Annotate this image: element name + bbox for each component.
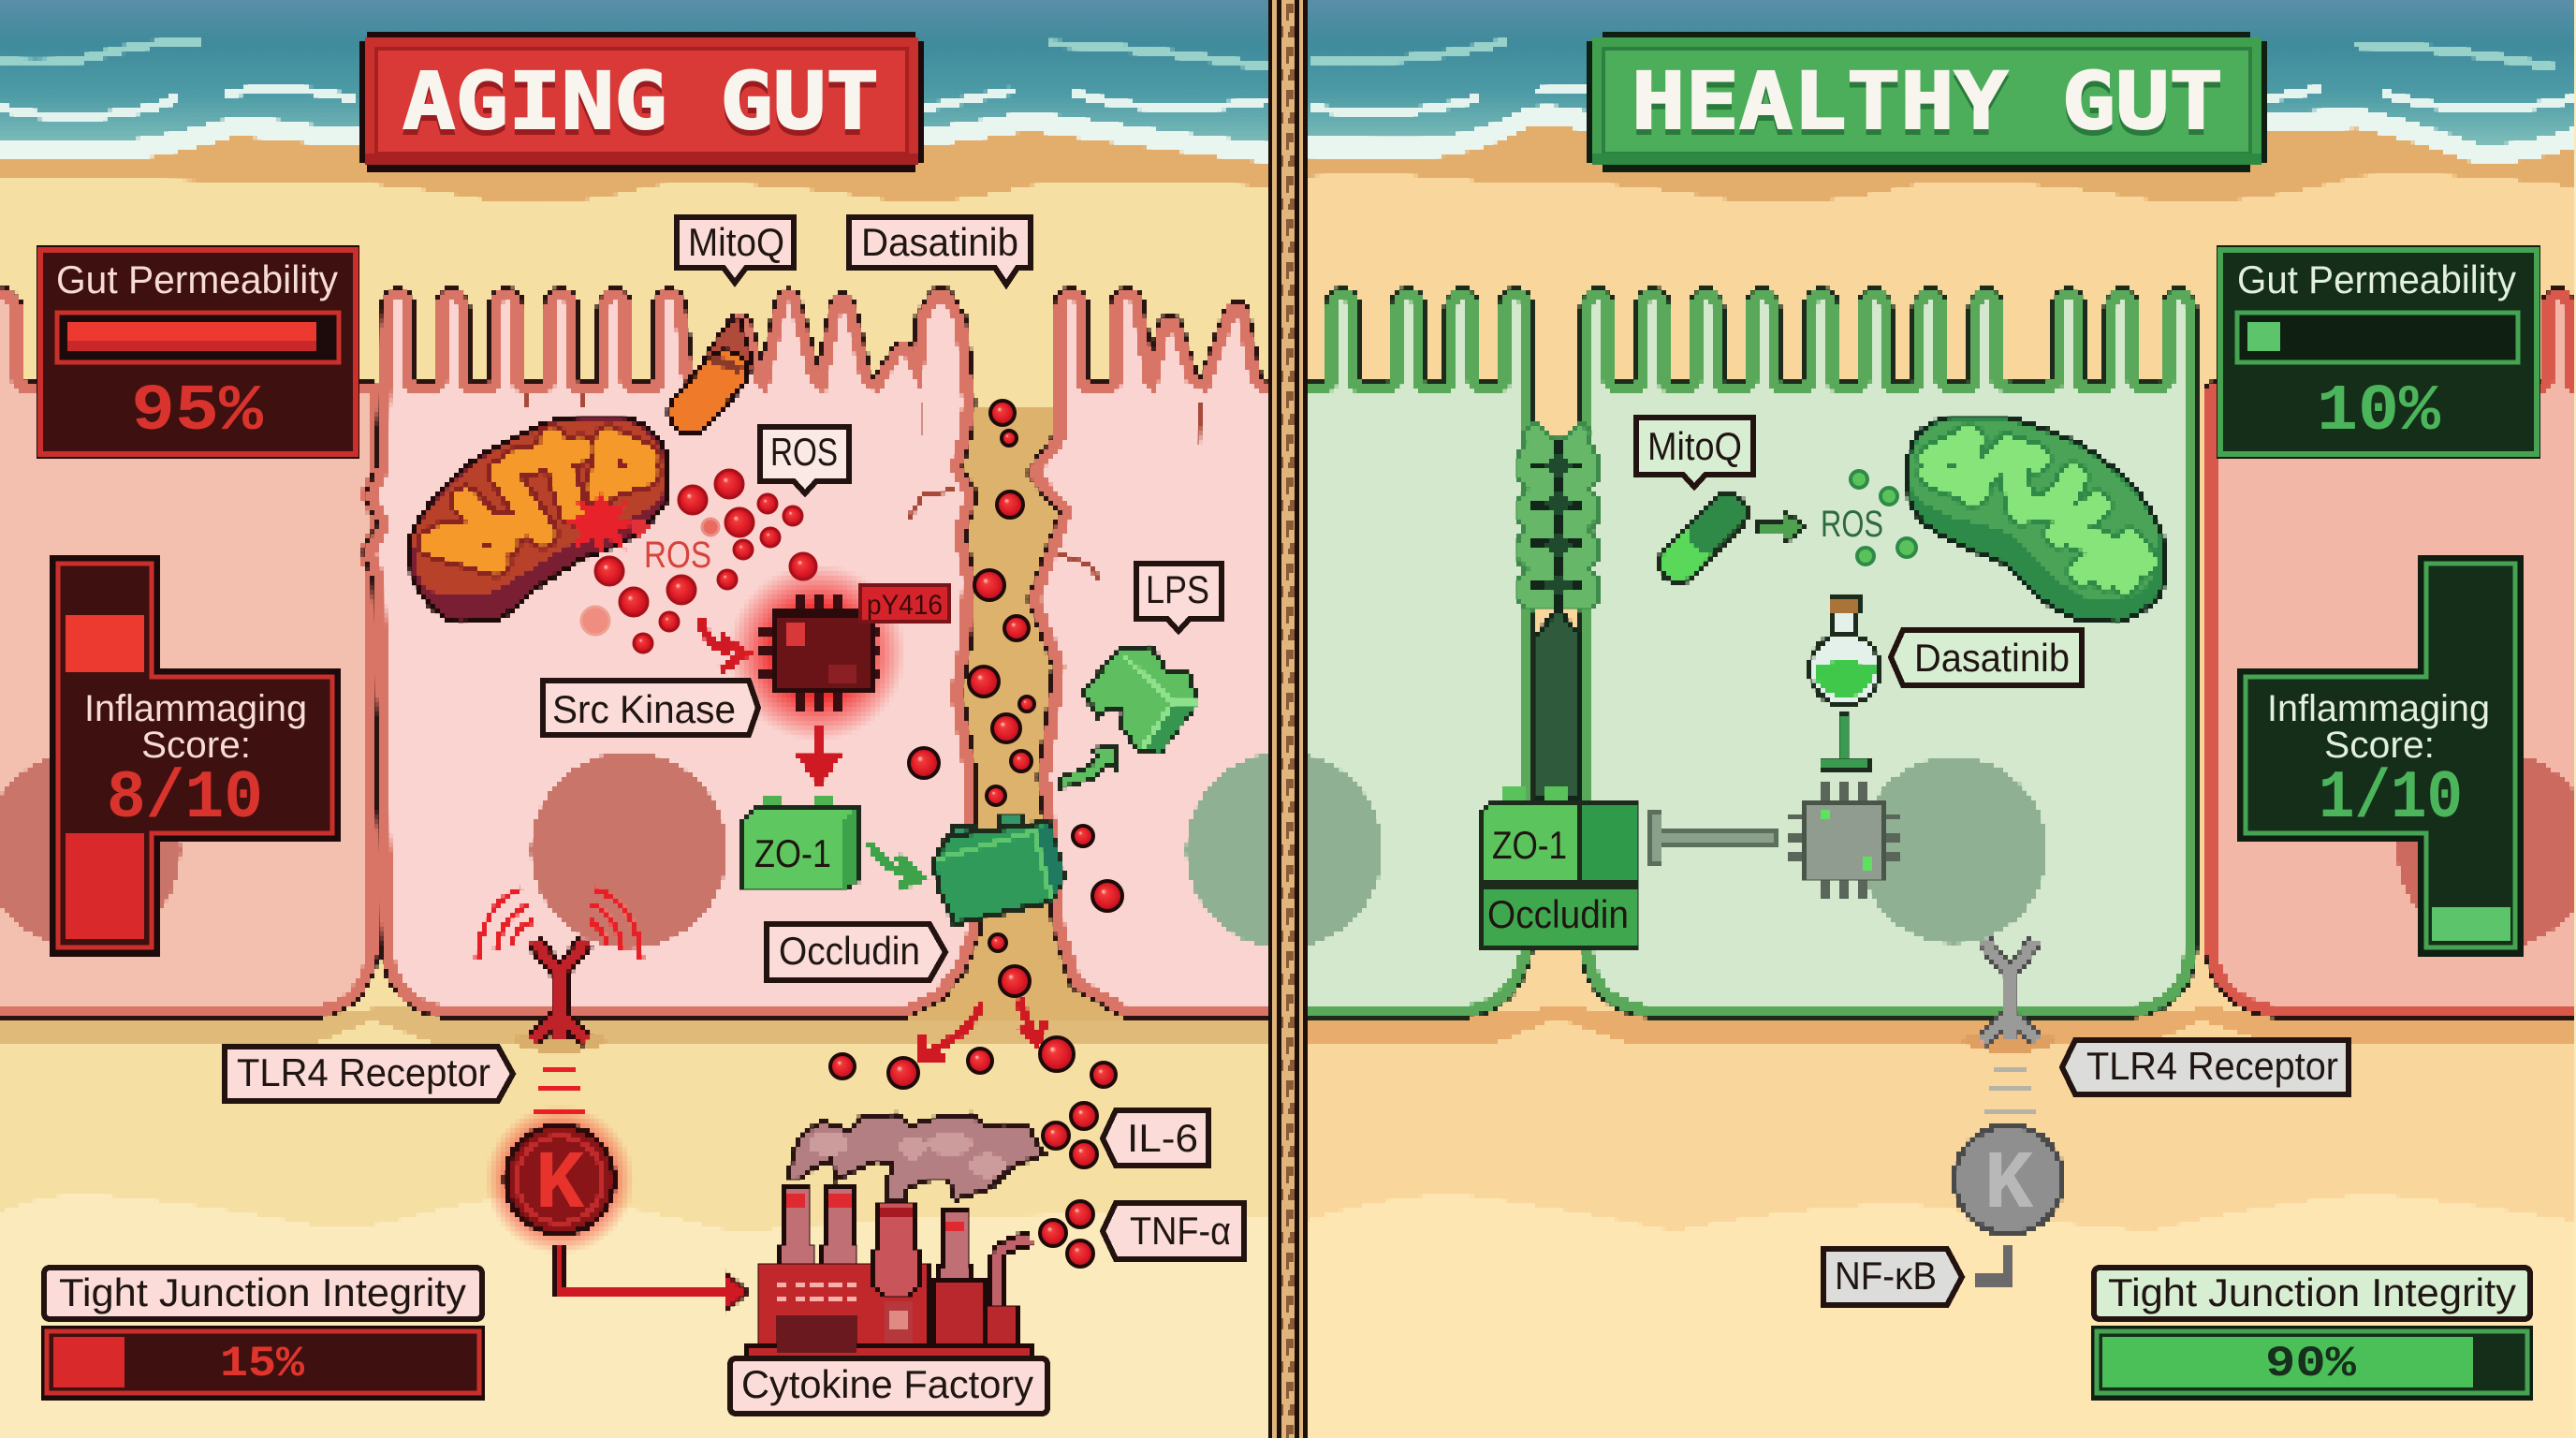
icon: LPS puzzle fragment <box>1083 646 1198 752</box>
signal dashes <box>534 1065 586 1114</box>
bar 90 <box>2091 1326 2533 1401</box>
label: MitoQ aging: MitoQ <box>688 220 784 264</box>
sand background: right <box>1288 0 2576 1438</box>
membrane cracks <box>526 394 1199 580</box>
ZO-1 and Occludin intact block <box>1481 787 1638 949</box>
label: Dasatinib aging: Dasatinib <box>861 220 1018 264</box>
label: IL-6 <box>1103 1110 1208 1166</box>
value: 10% <box>2317 375 2441 449</box>
label: Tight Junction Integrity <box>2108 1270 2516 1314</box>
TLR4 receptor: resting <box>1982 941 2038 1041</box>
label: Occludin healthy: Occludin <box>1487 892 1629 936</box>
panel: tight junction integrity aging <box>41 1268 485 1401</box>
panel: gut permeability aging <box>37 245 359 459</box>
label: Dasatinib aging <box>849 217 1031 285</box>
gauge fill <box>2432 907 2510 941</box>
TLR4 signal arcs <box>477 888 641 960</box>
label: Score: <box>2324 725 2435 766</box>
arrow: MitoQ to ROS <box>1758 510 1806 544</box>
aged cells <box>0 299 1282 1005</box>
label: LPS <box>1136 564 1222 631</box>
value: 90% <box>2265 1340 2356 1388</box>
label: ZO-1 aging: ZO-1 <box>754 831 831 875</box>
arrow: K to factory <box>560 1247 747 1313</box>
divider <box>1268 0 1308 1438</box>
icon: cytokine factory <box>746 1186 1032 1357</box>
arrow: ZO-1 to Occludin <box>871 843 921 888</box>
gauge fill <box>66 615 144 939</box>
progress bar 95 <box>57 313 339 362</box>
icon: activated Src kinase chip <box>728 564 906 741</box>
label: pY416: pY416 <box>867 590 943 621</box>
arrow: kinase to ZO-1 <box>803 724 835 781</box>
label: Src Kinase: Src Kinase <box>552 687 736 731</box>
label: ROS healthy: ROS <box>1821 504 1883 545</box>
value: 95% <box>131 375 264 449</box>
label: ROS callout aging: ROS <box>770 430 838 474</box>
nuclei <box>0 752 2576 948</box>
score: 8/10 <box>107 760 263 837</box>
icon: K letter healthy: K <box>1984 1139 2034 1232</box>
label: Inflammaging <box>2267 688 2490 729</box>
heading: Gut Permeability <box>2237 257 2516 301</box>
label: TNF-alpha <box>1103 1203 1244 1259</box>
title: HEALTHY GUT: HEALTHY GUT <box>1632 55 2223 147</box>
label: MitoQ aging <box>677 217 794 283</box>
title: AGING GUT <box>359 32 924 172</box>
panel: inflammaging healthy <box>2241 559 2520 953</box>
label: Occludin aging: Occludin <box>779 929 920 973</box>
healthy cells <box>1296 301 2576 1005</box>
label: TNF-alpha: TNF-α <box>1130 1209 1231 1253</box>
wave streaks <box>0 42 2576 117</box>
icon: mitochondrial damage burst <box>565 491 649 556</box>
icon: K letter aging: K <box>535 1139 585 1232</box>
score: 1/10 <box>2319 760 2463 837</box>
label: ROS free text: ROS <box>644 535 711 576</box>
label: NF-kB <box>1823 1249 1962 1305</box>
Occludin block detached <box>933 814 1064 924</box>
label: Dasatinib healthy: Dasatinib <box>1914 636 2070 680</box>
label: ZO-1 healthy: ZO-1 <box>1492 823 1567 867</box>
foam <box>0 0 2576 166</box>
label: LPS: LPS <box>1146 567 1209 611</box>
leaky lumen between aged cells <box>899 408 1151 1020</box>
label: Score: <box>141 725 251 766</box>
icon: MitoQ capsule healthy <box>1678 513 1728 564</box>
icon: inactive Src kinase chip <box>1786 783 1902 897</box>
value: 15% <box>220 1340 304 1388</box>
label: Inflammaging <box>84 688 307 729</box>
label: Dasatinib healthy <box>1891 630 2082 685</box>
panel: inflammaging aging <box>53 559 337 953</box>
blocked arrow to NF-kB <box>1974 1247 2009 1281</box>
TLR4 receptor: active <box>532 941 588 1041</box>
arrows: leak outflow <box>922 999 1046 1058</box>
label: ROS callout aging <box>760 427 849 493</box>
label: TLR4 Receptor aging: TLR4 Receptor <box>237 1050 490 1094</box>
ROS particles <box>581 470 816 653</box>
wet sand shoreline <box>0 0 2576 203</box>
label: NF-kB: NF-κB <box>1835 1254 1937 1298</box>
label: IL-6: IL-6 <box>1127 1116 1198 1160</box>
kinase K circle: resting <box>1954 1125 2063 1234</box>
sand background: left <box>0 0 1288 1438</box>
label: Occludin aging <box>767 924 945 980</box>
bar 15 <box>41 1326 485 1401</box>
kinase K: active <box>485 1105 635 1255</box>
ZO-1 block: aged <box>743 795 858 889</box>
label: MitoQ healthy: MitoQ <box>1647 424 1742 468</box>
basal tan band <box>0 1006 2576 1052</box>
arrow: Occludin to LPS <box>1058 746 1118 788</box>
grey signal dashes <box>1983 1065 2036 1114</box>
mitochondrion: healthy <box>1908 417 2165 623</box>
panel: tight junction integrity healthy <box>2091 1268 2533 1401</box>
icon: Dasatinib flask <box>1809 596 1881 705</box>
smoke <box>788 1114 1044 1201</box>
arrow: ROS to Src kinase <box>700 618 745 670</box>
label: TLR4 Receptor healthy: TLR4 Receptor <box>2086 1044 2338 1088</box>
faint ROS particles <box>1851 471 1916 565</box>
label: Tight Junction Integrity <box>59 1270 466 1314</box>
title: AGING GUT: AGING GUT <box>402 55 879 147</box>
title: HEALTHY GUT <box>1587 32 2267 172</box>
tight junction zipper: healthy <box>1516 423 1599 798</box>
inhibition bar: ZO-1 to kinase <box>1649 813 1777 863</box>
inhibition bar: Dasatinib to kinase <box>1821 713 1869 770</box>
progress bar 10 <box>2237 313 2518 362</box>
icon: MitoQ capsule stuck in membrane <box>691 316 754 412</box>
mitochondrion: aged <box>410 417 667 623</box>
label: Cytokine Factory: Cytokine Factory <box>741 1362 1033 1406</box>
label: MitoQ healthy <box>1636 418 1753 487</box>
heading: Gut Permeability <box>56 257 338 301</box>
leaked particles in lumen and below <box>830 401 1122 1267</box>
panel: gut permeability healthy <box>2217 245 2540 459</box>
sea <box>0 0 2576 145</box>
